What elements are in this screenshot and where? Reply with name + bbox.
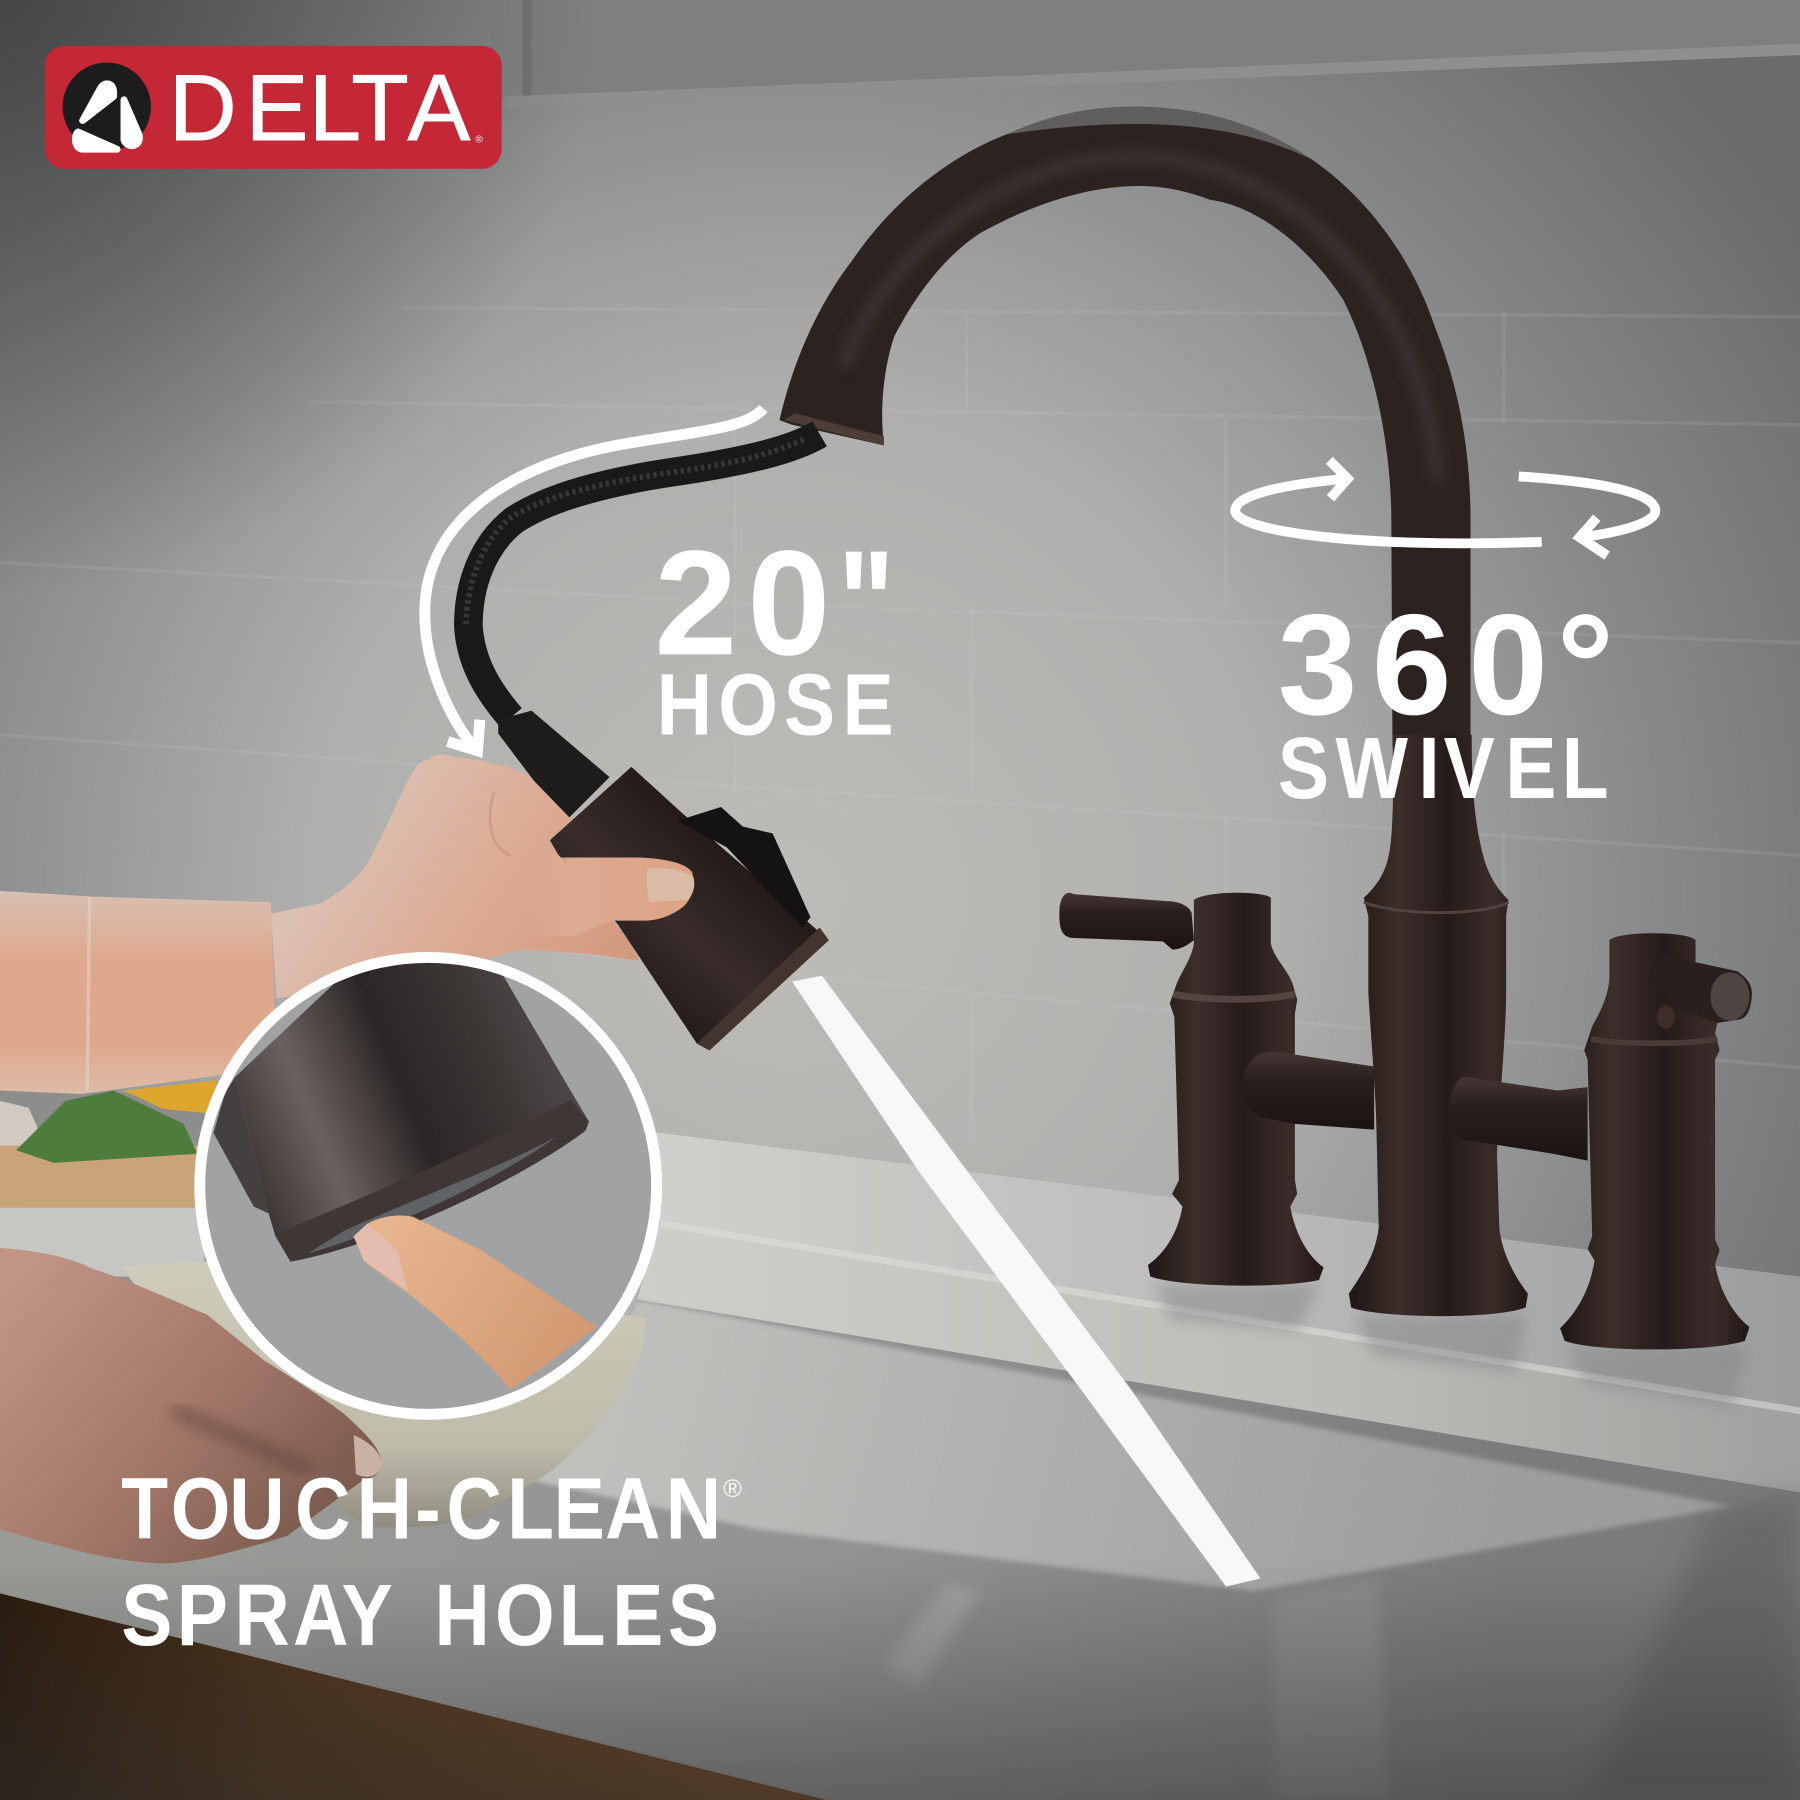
thumb on sprayer [528,855,694,936]
right handle column [1450,933,1752,1349]
water stream [792,976,1260,1586]
pull-down sprayer [550,767,829,1050]
touch-clean label [121,1461,742,1664]
faucet center body [1349,735,1528,1316]
lower hand [0,1248,381,1564]
bowl [121,1260,646,1528]
hose length label: " [838,520,895,686]
hose length label: 20 [654,519,830,686]
window ledge at top [491,0,1800,108]
wooden cabinet edge [0,1593,827,1800]
inset finger [354,1216,597,1390]
hose length label: HOSE [657,657,894,754]
swivel label [1278,585,1614,817]
bottom shading [0,1561,1800,1800]
touch-clean label: ® [723,1475,742,1503]
finger creases [490,792,511,855]
swivel rotation arrows [1235,460,1655,556]
left handle column [1059,893,1374,1286]
tile grout lines [0,308,1800,1148]
logo emblem [63,63,151,151]
swivel label: 360° [1278,585,1614,745]
faucet reflections on counter [1154,1283,1747,1406]
inset circle: touch-clean spray holes [200,941,657,1414]
kitchen counter and sink [0,1131,1800,1800]
logo wordmark: DELTA [169,55,471,160]
touch-clean label: SPRAY HOLES [121,1568,719,1664]
sleeve [0,891,277,1094]
faucet [779,107,1752,1349]
touch-clean label: TOUCH-CLEAN [121,1461,721,1557]
inset sprayer closeup [214,941,597,1390]
top-left corner shading [0,0,804,804]
braided hose [466,434,820,717]
sprayer connector [498,711,610,817]
registered mark: ® [475,134,483,145]
upper hand palm [271,754,639,999]
cutting board with greens [0,1080,217,1277]
hose length arrow [425,409,763,751]
hose length label [654,519,895,754]
logo badge [45,46,502,169]
swivel label: SWIVEL [1278,720,1609,817]
faucet neck and spout [779,107,1471,746]
